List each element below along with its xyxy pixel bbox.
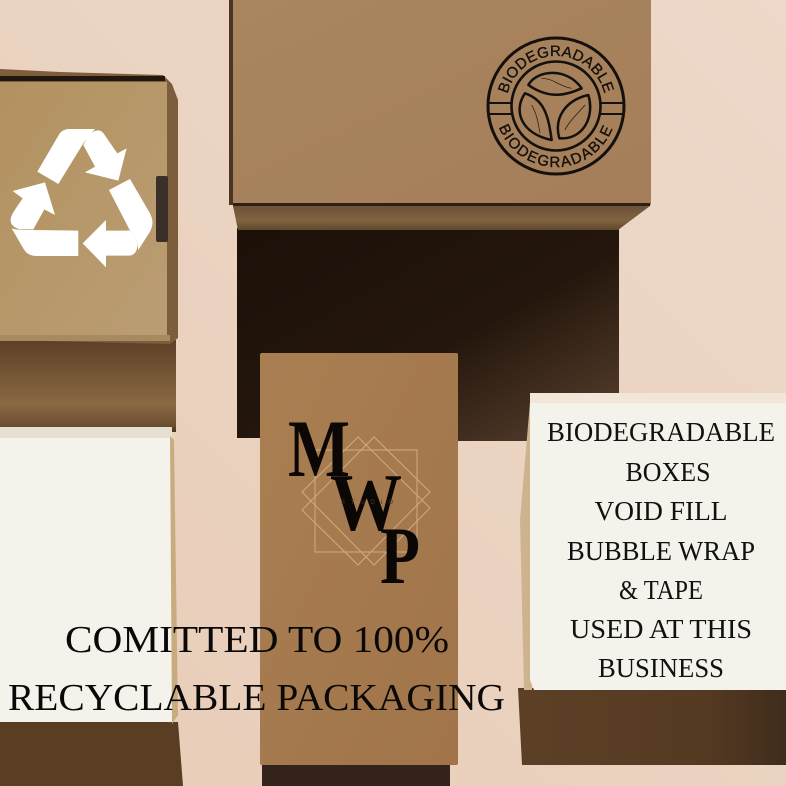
logo gold geometric frame bbox=[302, 437, 430, 565]
logo letters: P bbox=[380, 510, 420, 601]
box: white right box bbox=[520, 393, 786, 690]
stamp: biodegradable badge bbox=[486, 36, 626, 176]
text block: packaging materials bbox=[547, 417, 775, 683]
badge text: BIODEGRADABLE bbox=[498, 46, 614, 94]
box: white left box bbox=[0, 427, 178, 724]
text block: packaging materials: VOID FILL bbox=[594, 496, 728, 526]
logo letters: W bbox=[330, 457, 402, 548]
badge leaves bbox=[520, 73, 590, 140]
text block: packaging materials: BOXES bbox=[626, 457, 710, 487]
shadow: white left box bbox=[0, 722, 183, 786]
headline: recyclable packaging commitment: RECYCLABLE PACKAGING bbox=[8, 677, 505, 719]
shadow: white right box bbox=[518, 688, 786, 765]
badge text bbox=[498, 46, 614, 168]
badge text: BIODEGRADABLE bbox=[499, 124, 613, 168]
shadow: centre box bbox=[262, 762, 450, 786]
logo letters bbox=[288, 403, 420, 601]
text block: packaging materials: BUBBLE WRAP bbox=[567, 536, 755, 566]
logo letters: M bbox=[288, 403, 350, 494]
text block: packaging materials: BIODEGRADABLE bbox=[547, 417, 775, 447]
box: left kraft recycling box bbox=[0, 69, 178, 344]
logo letters: STUDIO bbox=[341, 500, 393, 506]
box: top kraft biodegradable box bbox=[229, 0, 651, 230]
text block: packaging materials: & TAPE bbox=[619, 575, 703, 605]
headline: recyclable packaging commitment: COMITTED TO 100% bbox=[65, 619, 449, 661]
headline: recyclable packaging commitment bbox=[8, 619, 505, 719]
text block: packaging materials: USED AT THIS bbox=[570, 614, 752, 644]
box: centre kraft logo box bbox=[260, 353, 458, 765]
shadow: left kraft box bbox=[0, 340, 176, 432]
shadow: top box bbox=[237, 228, 619, 441]
icon: recycling arrows bbox=[11, 129, 152, 267]
box side tab bbox=[156, 176, 168, 242]
text block: packaging materials: BUSINESS bbox=[598, 653, 724, 683]
logo: MWP Studio bbox=[288, 403, 430, 601]
